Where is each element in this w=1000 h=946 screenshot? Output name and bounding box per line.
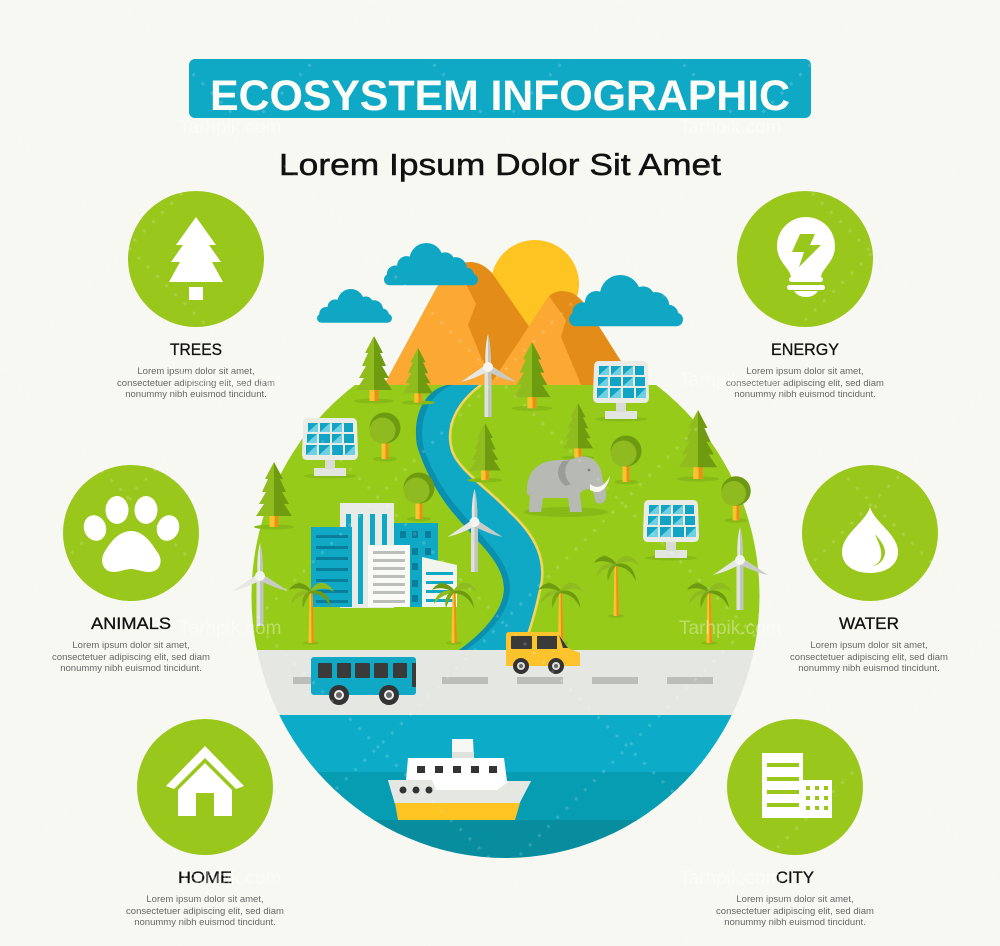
road — [257, 650, 754, 715]
solar panel — [593, 361, 649, 422]
description: energy: Lorem ipsum dolor sit amet, — [746, 366, 864, 377]
description: energy: consectetuer adipiscing elit, sed diam — [726, 378, 884, 389]
mountains — [384, 262, 636, 385]
turbine — [713, 527, 768, 610]
description: home: nonummy nibh euismod tincidunt. — [134, 917, 276, 928]
watermark: Tarhpik.com — [679, 370, 781, 391]
icon circle: trees — [128, 191, 264, 327]
palm — [687, 582, 732, 645]
watermark: Tarhpik.com — [679, 618, 781, 639]
car — [506, 632, 580, 674]
watermark: Tarhpik.com — [679, 117, 781, 138]
river — [416, 385, 542, 650]
label: trees: TREES — [170, 340, 222, 359]
round tree — [370, 412, 400, 462]
tree — [254, 462, 294, 530]
description: animals: nonummy nibh euismod tincidunt. — [60, 663, 202, 674]
watermark: Tarhpik.com — [679, 868, 781, 889]
title banner: ECOSYSTEM INFOGRAPHIC — [210, 72, 790, 120]
description: animals: consectetuer adipiscing elit, sed diam — [52, 652, 210, 663]
turbine — [233, 543, 288, 626]
description: trees — [117, 366, 275, 400]
label: home: HOME — [178, 868, 232, 887]
bus — [311, 657, 416, 705]
watermark: Tarhpik.com — [179, 868, 281, 889]
label: city: CITY — [776, 868, 814, 887]
watermark: Tarhpik.com — [179, 618, 281, 639]
description: animals: Lorem ipsum dolor sit amet, — [72, 640, 190, 651]
round tree — [721, 476, 751, 523]
solar panel — [302, 418, 358, 478]
label: water: WATER — [839, 614, 899, 633]
palm — [289, 582, 334, 645]
turbine — [461, 334, 516, 417]
subtitle: Lorem Ipsum Dolor Sit Amet — [279, 147, 721, 182]
icon circle: home — [137, 719, 273, 855]
elephant — [524, 456, 610, 517]
description: energy — [726, 366, 884, 400]
description: animals — [52, 640, 210, 674]
icon circle: energy — [737, 191, 873, 327]
icon circle: city — [727, 719, 863, 855]
label: animals: ANIMALS — [91, 614, 171, 633]
solar panel — [643, 500, 699, 560]
ship — [388, 739, 531, 820]
description: city — [716, 894, 874, 928]
turbine — [448, 489, 502, 572]
description: water: nonummy nibh euismod tincidunt. — [798, 663, 940, 674]
tree — [401, 348, 435, 405]
globe: land — [252, 385, 760, 651]
description: home — [126, 894, 284, 928]
description: trees: Lorem ipsum dolor sit amet, — [137, 366, 255, 377]
round tree — [404, 472, 434, 522]
description: trees: consectetuer adipiscing elit, sed diam — [117, 378, 275, 389]
watermark: Tarhpik.com — [179, 117, 281, 138]
palm — [432, 582, 477, 645]
tree — [561, 403, 595, 460]
description: trees: nonummy nibh euismod tincidunt. — [125, 389, 267, 400]
palm — [594, 555, 639, 618]
description: water: Lorem ipsum dolor sit amet, — [810, 640, 928, 651]
cloud — [317, 289, 392, 323]
description: home: consectetuer adipiscing elit, sed diam — [126, 906, 284, 917]
icon circle: water — [802, 465, 938, 601]
description: city: nonummy nibh euismod tincidunt. — [724, 917, 866, 928]
tree — [467, 423, 503, 482]
description: home: Lorem ipsum dolor sit amet, — [146, 894, 264, 905]
label: energy: ENERGY — [771, 340, 839, 359]
tree — [677, 410, 719, 482]
description: energy: nonummy nibh euismod tincidunt. — [734, 389, 876, 400]
watermark: Tarhpik.com — [179, 370, 281, 391]
sea — [279, 715, 732, 858]
description: water — [790, 640, 948, 674]
palm — [538, 582, 584, 645]
sun — [491, 240, 579, 328]
description: water: consectetuer adipiscing elit, sed diam — [790, 652, 948, 663]
cloud — [569, 275, 683, 326]
icon circle: animals — [63, 465, 199, 601]
round tree — [610, 436, 642, 484]
tree — [354, 336, 394, 404]
buildings — [311, 503, 457, 608]
tree — [512, 342, 552, 411]
cloud — [384, 243, 478, 285]
description: city: Lorem ipsum dolor sit amet, — [736, 894, 854, 905]
description: city: consectetuer adipiscing elit, sed diam — [716, 906, 874, 917]
